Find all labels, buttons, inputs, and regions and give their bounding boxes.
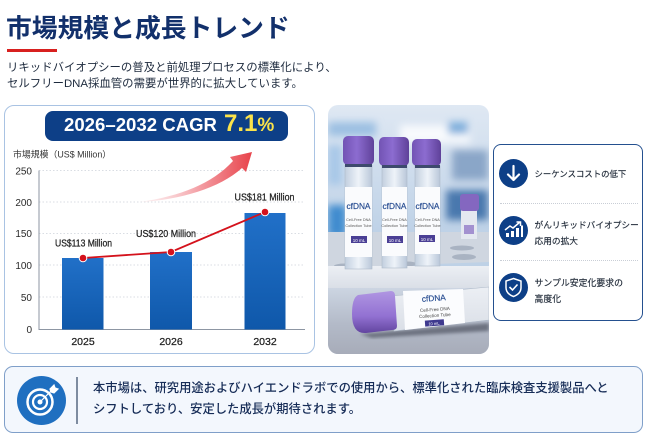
tube 3: cfDNA bbox=[416, 201, 440, 211]
driver label: シーケンスコストの低下 bbox=[534, 169, 626, 179]
value labels bbox=[55, 192, 294, 250]
x axis labels: 2026 bbox=[159, 336, 183, 348]
value labels: US$113 Million bbox=[55, 238, 112, 250]
tube 1: Cell-Free DNA bbox=[346, 218, 371, 222]
tube 2: cfDNA bbox=[383, 201, 407, 211]
driver label: 高度化 bbox=[534, 294, 561, 304]
intro text bbox=[7, 61, 337, 90]
tube 1: 10 mL bbox=[353, 238, 366, 243]
CAGR banner: 7.1% bbox=[224, 110, 274, 137]
value labels: US$120 Million bbox=[136, 229, 196, 240]
driver 3: sample stabilization bbox=[499, 273, 623, 304]
lying tube: 10 mL bbox=[428, 321, 440, 326]
summary text: 本市場は、研究用途およびハイエンドラボでの使用から、標準化された臨床検査支援製品へと bbox=[93, 381, 608, 395]
tube 2: Collection Tube bbox=[381, 224, 408, 228]
chart bbox=[13, 148, 305, 348]
title underline bbox=[7, 49, 57, 52]
icon: shield check bbox=[499, 273, 528, 302]
CAGR banner: 2026–2032 CAGR bbox=[64, 114, 217, 135]
driver label bbox=[534, 220, 639, 246]
x axis labels: 2032 bbox=[253, 336, 277, 348]
driver label bbox=[534, 278, 623, 304]
driver 1: sequencing cost bbox=[499, 159, 626, 188]
driver label: サンプル安定化要求の bbox=[534, 278, 623, 288]
CAGR banner bbox=[45, 111, 288, 141]
driver label: がんリキッドバイオプシー bbox=[534, 220, 639, 230]
bars bbox=[62, 213, 286, 330]
tube 3: Collection Tube bbox=[414, 224, 441, 228]
tube 1: cfDNA bbox=[347, 201, 371, 211]
panel: market size chart bbox=[4, 105, 315, 354]
y axis labels: 250 bbox=[15, 166, 32, 178]
tube 1: Collection Tube bbox=[345, 224, 372, 228]
title: 市場規模と成長トレンド bbox=[6, 15, 290, 43]
tube 3 bbox=[412, 139, 441, 266]
lying tube bbox=[352, 287, 489, 338]
small background tube bbox=[460, 194, 479, 239]
icon: down arrow bbox=[499, 159, 528, 188]
driver 2: liquid biopsy use bbox=[499, 216, 639, 246]
driver label: 応用の拡大 bbox=[534, 236, 578, 246]
tube 1 bbox=[343, 136, 374, 269]
tube 2: 10 mL bbox=[389, 238, 402, 243]
tube 2: Cell-Free DNA bbox=[382, 218, 407, 222]
lying tube: Collection Tube bbox=[419, 312, 451, 319]
y axis labels: 50 bbox=[21, 293, 32, 304]
x axis labels: 2025 bbox=[71, 336, 95, 348]
photo: cfDNA collection tubes bbox=[328, 105, 489, 354]
axis title: 市場規模（US$ Million） bbox=[13, 148, 111, 160]
lying tube: cfDNA bbox=[421, 292, 447, 304]
y axis labels bbox=[15, 166, 32, 336]
summary text bbox=[93, 381, 608, 416]
tube 3: 10 mL bbox=[421, 237, 434, 242]
intro text: セルフリーDNA採血管の需要が世界的に拡大しています。 bbox=[7, 78, 303, 90]
tray bbox=[328, 232, 489, 268]
blurred lab background bbox=[328, 122, 488, 237]
lying tube: Cell-Free DNA bbox=[420, 306, 451, 313]
y axis labels: 100 bbox=[15, 261, 32, 272]
icon: growth bars bbox=[499, 216, 528, 245]
y axis labels: 150 bbox=[15, 229, 32, 240]
panel: growth drivers bbox=[493, 144, 643, 321]
summary text: シフトしており、安定した成長が期待されます。 bbox=[93, 402, 361, 416]
panel: market summary callout bbox=[4, 366, 643, 433]
icon: target bbox=[17, 376, 66, 425]
y axis labels: 0 bbox=[26, 325, 32, 336]
y axis labels: 200 bbox=[15, 198, 32, 209]
trend line bbox=[79, 208, 269, 262]
growth arrow bbox=[140, 152, 252, 202]
value labels: US$181 Million bbox=[234, 192, 294, 204]
intro text: リキッドバイオプシーの普及と前処理プロセスの標準化により、 bbox=[7, 62, 337, 74]
x axis labels bbox=[71, 336, 277, 348]
divider bbox=[76, 377, 78, 424]
tube 3: Cell-Free DNA bbox=[415, 218, 440, 222]
tube 2 bbox=[379, 137, 409, 268]
